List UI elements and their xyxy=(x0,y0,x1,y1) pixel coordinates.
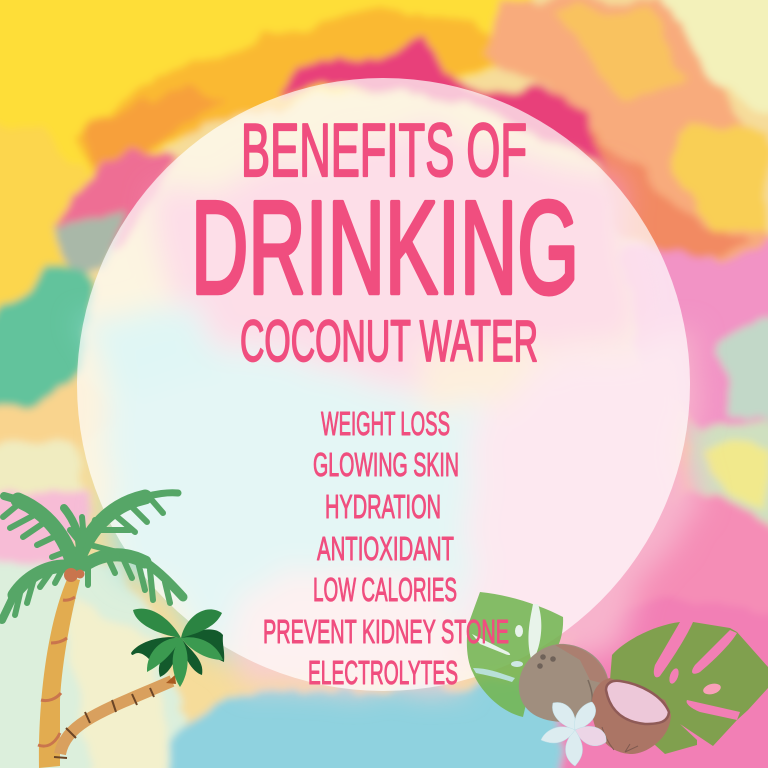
heading: coconut water: COCONUT WATER xyxy=(240,309,538,374)
small palm crown xyxy=(131,609,224,687)
small palm trunk xyxy=(60,681,172,754)
benefits list xyxy=(263,405,509,691)
coconut half xyxy=(592,678,671,754)
whole coconut xyxy=(519,644,609,722)
list item: hydration: HYDRATION xyxy=(325,488,441,525)
coconut cluster xyxy=(64,568,84,582)
icon: small leaning palm tree xyxy=(54,609,224,758)
icon: tall palm tree xyxy=(2,493,183,768)
icon: light green monstera leaf xyxy=(467,592,563,717)
palm trunk xyxy=(39,577,80,768)
list item: antioxidant: ANTIOXIDANT xyxy=(317,530,454,567)
translucent white circle panel xyxy=(77,78,690,691)
palm fronds xyxy=(2,493,183,620)
heading: benefits of: BENEFITS OF xyxy=(241,108,527,192)
icon: coconut and flower xyxy=(519,644,671,766)
list item: electrolytes: ELECTROLYTES xyxy=(308,654,458,691)
icon: dark green monstera leaf xyxy=(610,622,768,754)
list item: weight loss: WEIGHT LOSS xyxy=(321,405,450,442)
flower xyxy=(541,702,606,766)
list item: glowing skin: GLOWING SKIN xyxy=(313,446,459,483)
title block xyxy=(191,108,579,374)
list item: low calories: LOW CALORIES xyxy=(313,571,457,608)
list item: prevent kidney stone: PREVENT KIDNEY STONE xyxy=(263,613,509,650)
